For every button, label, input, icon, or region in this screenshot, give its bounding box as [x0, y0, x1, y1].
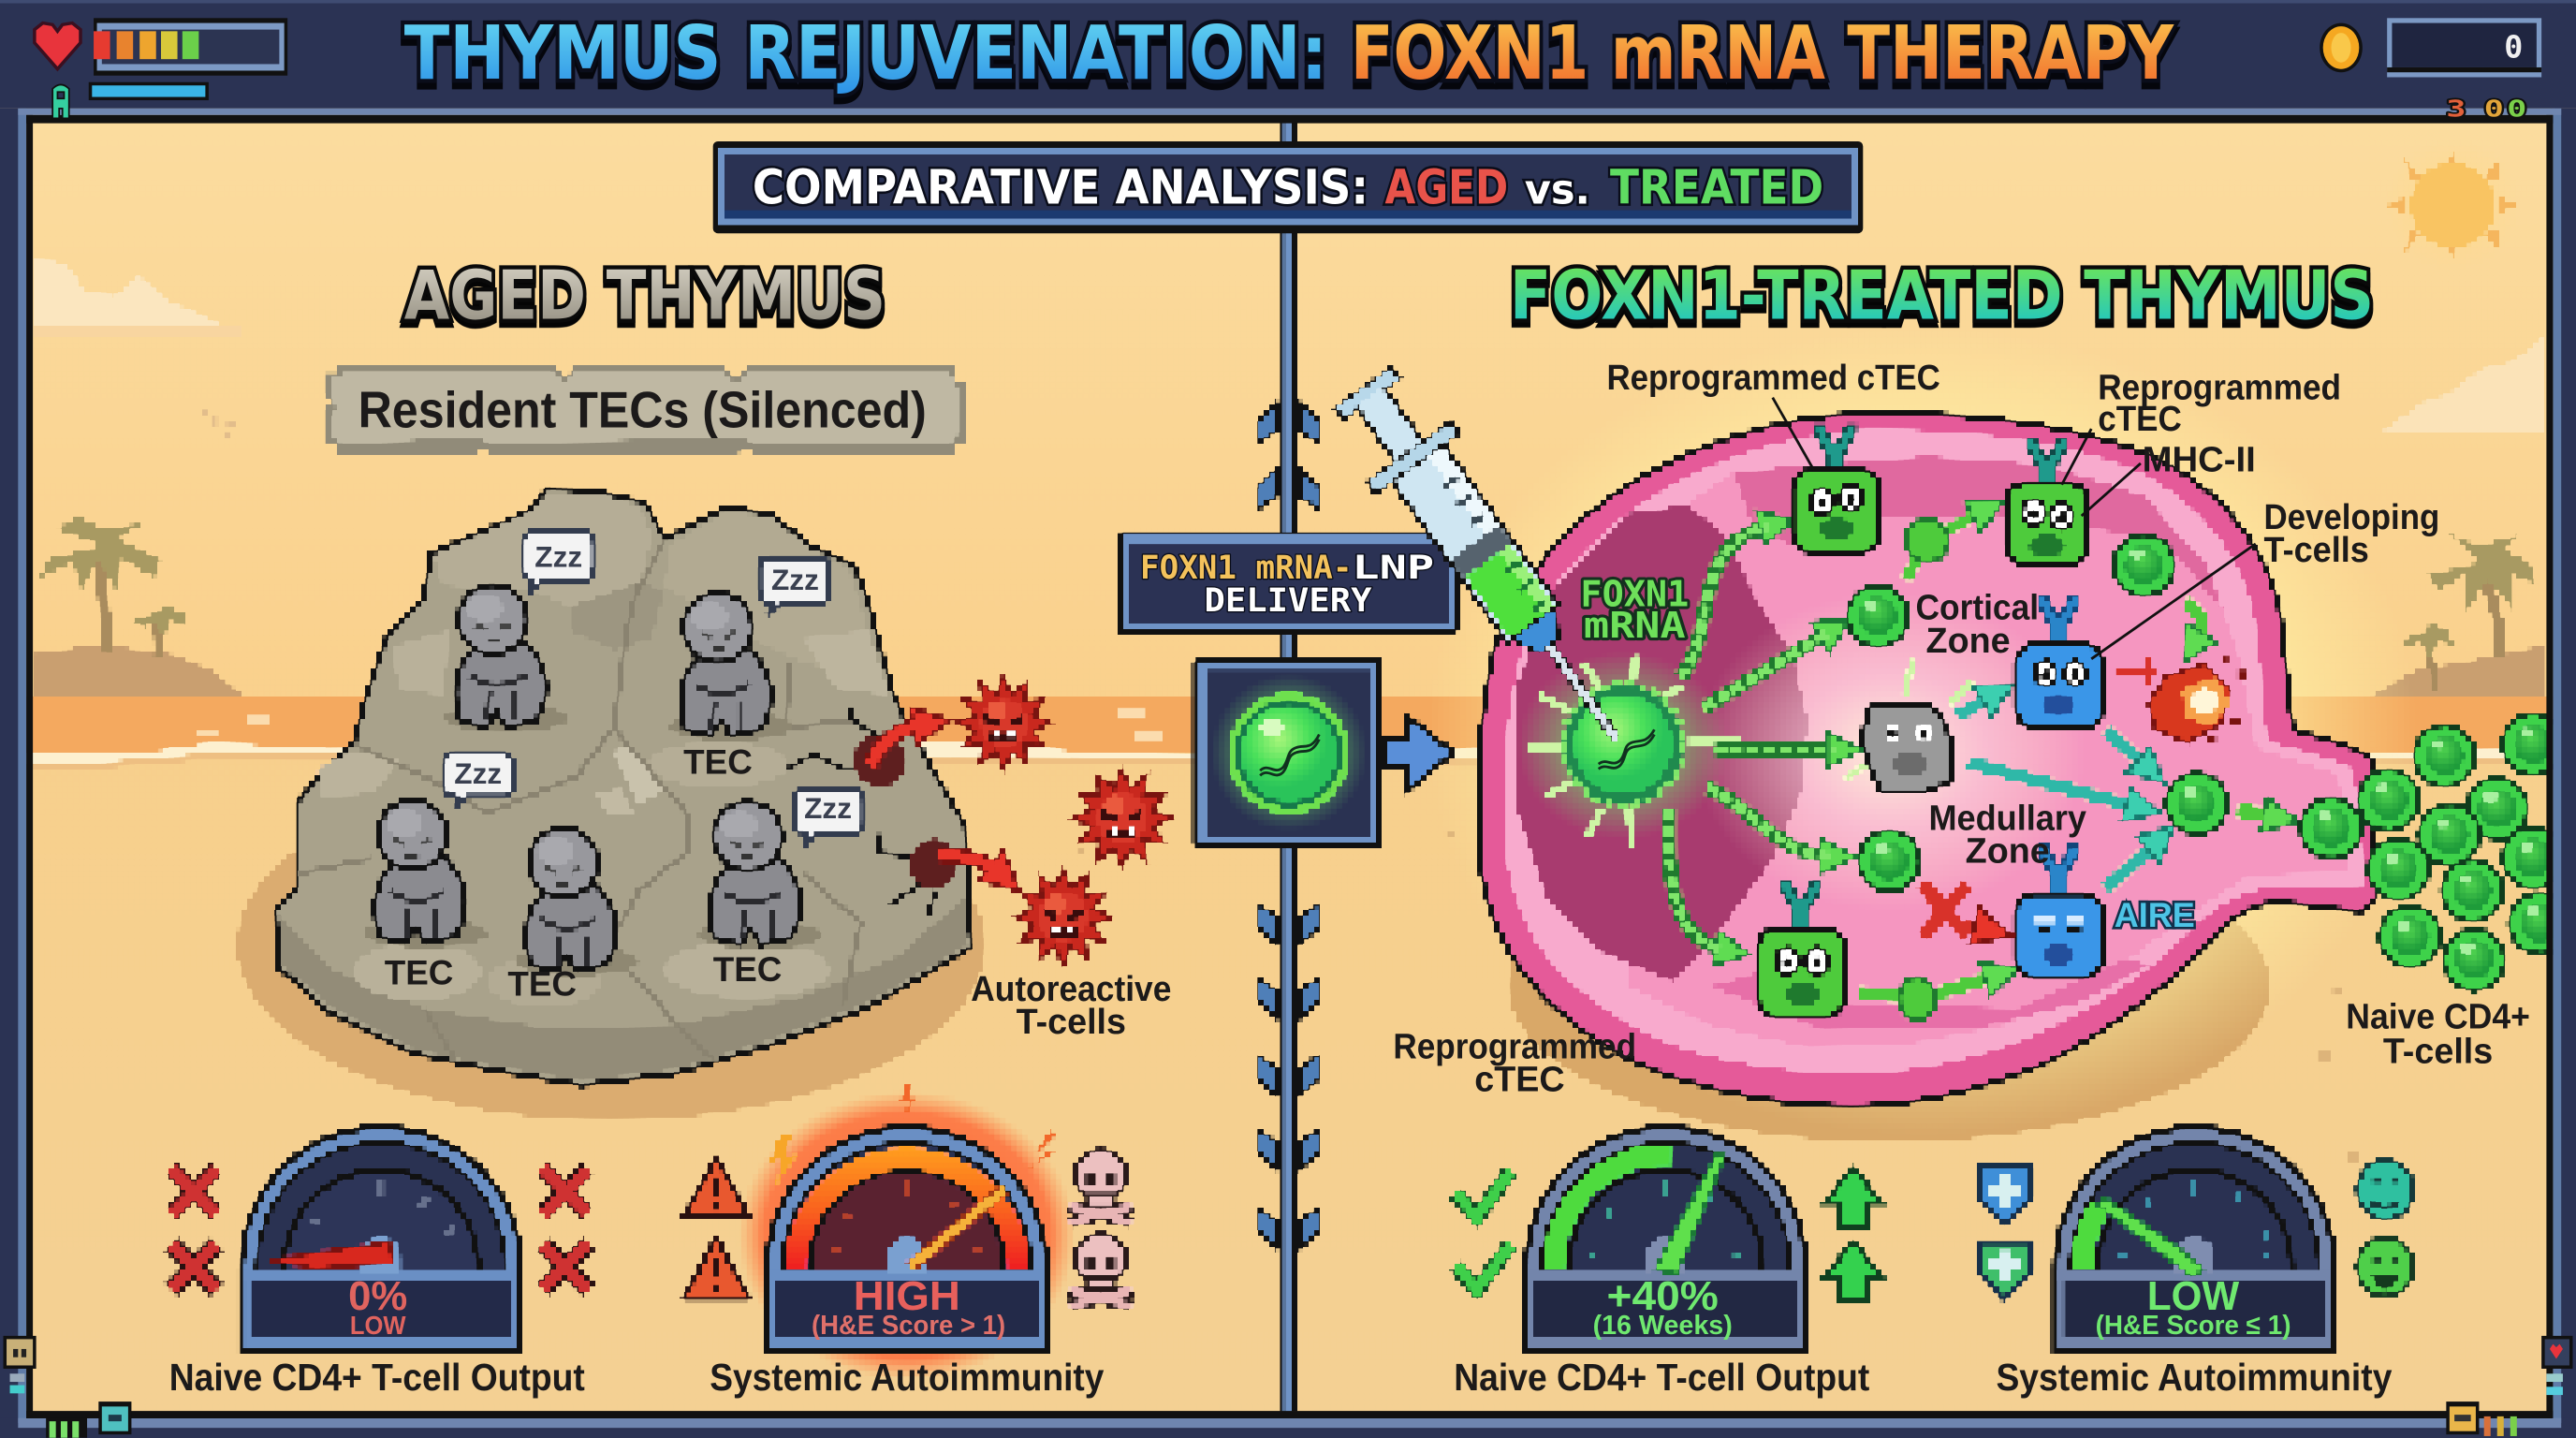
TEC labels: TEC	[385, 953, 453, 991]
red arrows from rock	[871, 725, 999, 873]
gauge captions: Naive CD4+ T-cell Output	[169, 1356, 585, 1399]
thymus labels: T-cells	[2264, 530, 2369, 569]
TEC labels: TEC	[507, 965, 577, 1004]
thymus labels: T-cells	[2383, 1032, 2493, 1071]
label leader lines	[1773, 398, 2256, 659]
label: autoreactive T-cells: T-cells	[1017, 1002, 1126, 1041]
Zzz labels: Zzz	[454, 756, 502, 790]
corner decorations right	[2446, 1336, 2572, 1436]
delivery label text: LNP	[1352, 549, 1434, 587]
thymus labels: Developing	[2264, 497, 2439, 536]
HUD: heart	[35, 23, 80, 69]
palm trees right	[2365, 534, 2546, 698]
sleeping TEC cell 2	[668, 594, 794, 741]
thymus labels: Reprogrammed	[1393, 1026, 1636, 1065]
aged thymus rock	[275, 489, 972, 1085]
HUD numbers: 0	[2507, 95, 2526, 123]
naive CD4 T-cell cluster	[2298, 712, 2572, 992]
gauge captions: Systemic Autoimmunity	[1996, 1356, 2393, 1399]
thymus labels: MHC-II	[2143, 440, 2256, 479]
FOXN1 mRNA label	[1580, 574, 1689, 647]
reprogrammed cTEC cell bottom	[1758, 881, 1845, 1017]
HUD: health bar	[94, 18, 287, 76]
corner decorations left	[4, 1336, 131, 1438]
title	[404, 10, 2174, 96]
heading: aged thymus: AGED THYMUS	[404, 256, 886, 334]
TEC labels: TEC	[683, 743, 753, 782]
title: THYMUS REJUVENATION:	[404, 10, 1327, 96]
cracks and holes	[784, 708, 958, 917]
label: autoreactive T-cells: Autoreactive	[971, 969, 1171, 1008]
rock shadow	[237, 769, 986, 1121]
Zzz labels: Zzz	[804, 791, 852, 825]
icons: warning triangles	[683, 1157, 749, 1299]
gauge readouts: LOW	[2147, 1273, 2240, 1319]
thymus labels: Cortical	[1915, 588, 2039, 627]
delivery label box	[1117, 531, 1459, 634]
thymus T-cells	[1845, 533, 2230, 894]
gauge: aged naive CD4 output	[238, 1123, 524, 1354]
decorative birds	[200, 407, 235, 439]
thymus shadow and glow	[1429, 329, 2415, 1142]
HUD: coin	[2320, 23, 2363, 72]
delivery label text: FOXN1 mRNA-	[1140, 549, 1352, 587]
thymus labels: cTEC	[2098, 399, 2182, 438]
HUD numbers: 3	[2446, 95, 2466, 123]
FOXN1 mRNA label: FOXN1	[1580, 574, 1689, 616]
autoreactive T-cell monster 3	[1015, 869, 1111, 965]
speech bubbles	[444, 533, 864, 844]
thymus labels	[1393, 358, 2530, 1098]
TEC labels: TEC	[713, 950, 782, 989]
palm trees left	[33, 516, 246, 698]
sun	[2384, 137, 2522, 274]
gauge: treated systemic autoimmunity	[2052, 1123, 2338, 1354]
divider	[1258, 115, 1319, 1413]
AIRE label: AIRE	[2115, 896, 2195, 934]
icons: green check marks	[1456, 1170, 1512, 1290]
delivery capsule box	[1193, 657, 1383, 849]
red X with arrow	[1922, 884, 1984, 936]
gauge readouts: 0%	[348, 1273, 407, 1319]
gauge readouts	[348, 1273, 2291, 1341]
delivery label text: DELIVERY	[1204, 581, 1372, 620]
thymus labels: Zone	[1966, 830, 2050, 870]
treated thymus organ	[1478, 413, 2376, 1107]
thymus labels: Reprogrammed	[2098, 367, 2341, 406]
DNA strands	[1260, 729, 1654, 775]
autoreactive T-cell monster 1	[957, 676, 1050, 770]
comparative analysis banner box	[713, 141, 1863, 233]
glow rays	[1528, 655, 1972, 847]
medullary lower chamber	[1711, 960, 2152, 1031]
heading: FOXN1-treated thymus: FOXN1-TREATED THYMUS	[1510, 256, 2374, 334]
green delivery arrows	[1669, 513, 2274, 999]
banner heading text: AGED	[1385, 161, 1508, 216]
HUD numbers: 0	[2504, 28, 2523, 65]
thymus labels: Reprogrammed cTEC	[1606, 358, 1940, 397]
HUD numbers: 0	[2484, 95, 2504, 123]
thymus labels: Naive CD4+	[2346, 997, 2530, 1036]
gray silent TEC being reprogrammed	[1862, 703, 1954, 792]
TEC labels	[385, 743, 782, 1004]
gauge readouts: (H&E Score ≤ 1)	[2096, 1311, 2291, 1341]
gauge captions: Systemic Autoimmunity	[710, 1356, 1105, 1399]
thymus labels: Zone	[1926, 621, 2011, 660]
sleeping TEC cell 4	[514, 829, 639, 976]
banner heading text	[753, 161, 1823, 216]
icons: smiling faces	[2358, 1160, 2413, 1297]
delivery label text	[1140, 549, 1434, 620]
icons: shields	[1978, 1167, 2032, 1299]
syringe	[1318, 354, 1661, 770]
HUD: energy bar	[89, 82, 209, 100]
thymus labels: cTEC	[1474, 1059, 1565, 1098]
clouds	[33, 259, 2545, 433]
gauge captions	[169, 1356, 2393, 1399]
icons: green up arrows	[1825, 1167, 1881, 1301]
blue arrow to thymus	[1383, 716, 1454, 790]
thymus labels: Medullary	[1928, 798, 2086, 837]
sleeping TEC cell 3	[363, 800, 488, 948]
Zzz labels	[454, 540, 852, 825]
gauge readouts: HIGH	[854, 1273, 960, 1319]
autoreactive T-cell monster 2	[1073, 769, 1171, 868]
HUD numbers	[2446, 28, 2526, 123]
plaque text: Resident TECs (Silenced)	[359, 381, 927, 438]
small transition cells on arrows	[1899, 520, 1949, 1020]
gauge: aged systemic autoimmunity	[738, 1084, 1076, 1380]
gauge readouts: (16 Weeks)	[1593, 1311, 1733, 1341]
label: autoreactive T-cells	[971, 969, 1171, 1041]
icons: red crosses	[171, 1168, 588, 1290]
gauge: treated naive CD4 output	[1523, 1123, 1808, 1354]
HUD: small character	[52, 84, 69, 118]
AIRE mTEC cell blue lower	[2016, 846, 2103, 977]
banner heading text: COMPARATIVE ANALYSIS:	[753, 161, 1368, 216]
gauge readouts: LOW	[350, 1311, 406, 1340]
HUD: score box	[2387, 18, 2541, 77]
dark cortex region	[1516, 505, 1808, 982]
banner heading text: TREATED	[1610, 161, 1823, 216]
negative selection: red block and explosion	[2115, 654, 2246, 744]
reprogrammed cTEC cell right	[2006, 439, 2088, 565]
plaque: resident TECs	[324, 366, 964, 455]
sleeping TEC cell 5	[698, 801, 823, 949]
sleeping TEC cell 1	[444, 585, 568, 733]
title: FOXN1 mRNA THERAPY	[1351, 10, 2174, 96]
gauge captions: Naive CD4+ T-cell Output	[1454, 1356, 1869, 1399]
gauge readouts: (H&E Score > 1)	[812, 1311, 1005, 1341]
icons: skulls	[1070, 1151, 1132, 1306]
FOXN1 mRNA label: mRNA	[1584, 605, 1686, 647]
capsule in thymus	[1562, 683, 1684, 805]
reprogrammed cTEC cell top	[1793, 426, 1880, 552]
banner heading text: vs.	[1525, 167, 1590, 214]
Zzz labels: Zzz	[771, 563, 819, 596]
developing T-cell blue upper	[2016, 596, 2103, 728]
gauge readouts: +40%	[1606, 1273, 1719, 1319]
cortical chamber	[1734, 456, 2223, 610]
Zzz labels: Zzz	[534, 540, 582, 574]
